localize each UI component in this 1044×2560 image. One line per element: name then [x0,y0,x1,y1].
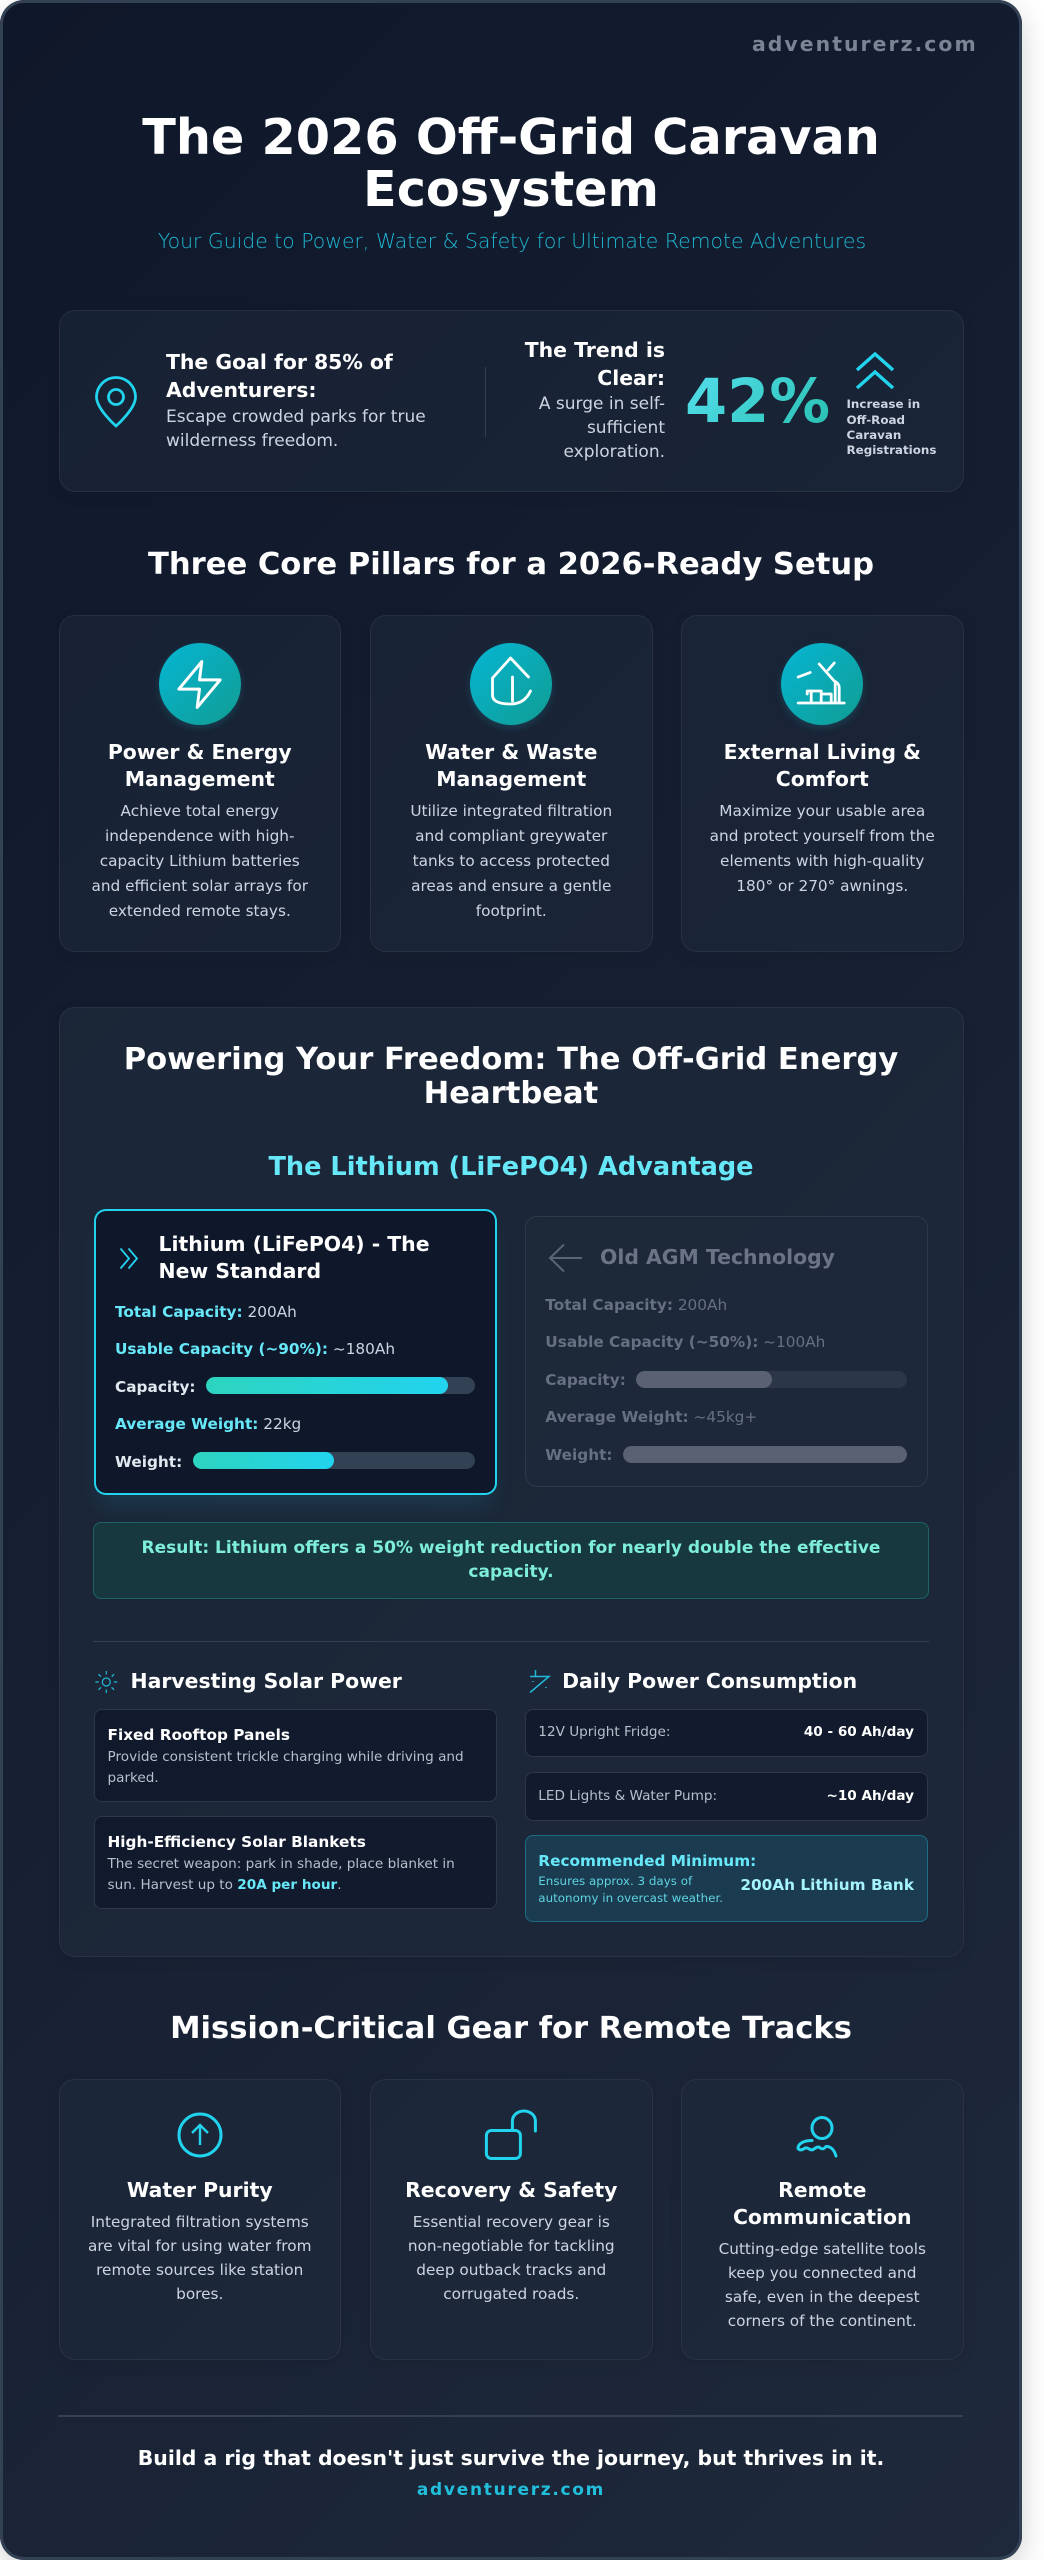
statistic label: Off-Road [846,412,905,426]
title: Ecosystem [363,160,659,218]
icon: double chevron up [856,352,894,390]
statistic label: Caravan [846,428,901,442]
weight bar [192,1452,475,1469]
heading: mission-critical gear: Mission-Critical Gear for Remote Tracks [170,2011,852,2046]
gear title: Communication [733,2205,912,2229]
heading: harvesting solar power: Harvesting Solar Power [130,1669,402,1693]
trend description: A surge in self- [539,394,665,414]
pillar description: tanks to access protected [413,852,610,870]
closing statement: Build a rig that doesn't just survive the journey, but thrives in it. [138,2446,884,2470]
lithium card title: Lithium (LiFePO4) - The [158,1232,430,1256]
pillar description: extended remote stays. [109,902,291,920]
row: lights and pump consumption [525,1772,928,1821]
lights value: ~10 Ah/day [826,1788,914,1804]
panel: power and energy [58,615,341,952]
title: The 2026 Off-Grid Caravan [142,108,880,166]
goal heading: The Goal for 85% of [166,350,393,374]
gear description: Essential recovery gear is [413,2213,610,2231]
pillar title: Power & Energy [108,740,292,764]
heading: three core pillars: Three Core Pillars for a 2026-Ready Setup [148,547,874,582]
gear description: safe, even in the deepest [725,2288,920,2306]
brand tag: adventurerz.com [752,32,978,56]
capacity bar [206,1377,475,1394]
gear description [719,2240,926,2330]
capacity label: Capacity: [115,1378,196,1396]
pillar description: and compliant greywater [415,827,607,845]
recommended value: 200Ah Lithium Bank [740,1876,914,1894]
result text [142,1538,880,1582]
gear description: are vital for using water from [88,2237,312,2255]
pillar title: Water & Waste [425,740,597,764]
footer brand: adventurerz.com [417,2480,605,2500]
statistic label: Increase in [846,397,920,411]
gear description: corrugated roads. [443,2285,579,2303]
panel: powering your freedom [58,1007,964,1957]
gear description: deep outback tracks and [416,2261,606,2279]
usable capacity: Usable Capacity (~90%): ~180Ah [115,1340,395,1358]
card: old AGM [525,1216,928,1487]
average weight: Average Weight: 22kg [115,1415,301,1433]
icon: double chevron right [120,1248,138,1270]
gear title: Water Purity [127,2178,273,2202]
statistic: 42 percent: 42% [685,367,830,437]
pillar title: Management [125,766,275,790]
result text: Result: Lithium offers a 50% weight reduction for nearly double the effective [142,1538,880,1558]
box: solar blankets [94,1816,497,1909]
lithium advantage subheading: The Lithium (LiFePO4) Advantage [268,1152,754,1182]
pillar description: Achieve total energy [121,802,279,820]
total capacity: Total Capacity: 200Ah [115,1303,297,1321]
recommended note: Ensures approx. 3 days of [538,1874,692,1888]
horizontal divider [93,1640,929,1642]
icon: left arrow [548,1244,582,1272]
panel: recovery and safety [370,2079,652,2360]
gear description [408,2213,615,2303]
lithium card title [158,1232,430,1283]
callout: recommended minimum [525,1835,928,1922]
pillar description: elements with high-quality [720,852,924,870]
gear description: corners of the continent. [728,2312,917,2330]
capacity label: Capacity: [545,1371,626,1389]
weight label: Weight: [545,1446,613,1464]
recommended note [538,1874,723,1905]
box description [107,1856,455,1892]
pillar title [425,740,597,790]
weight label: Weight: [115,1453,182,1471]
box description: sun. Harvest up to 20A per hour. [108,1876,342,1892]
card: lithium [94,1209,497,1495]
recommended title: Recommended Minimum: [538,1852,756,1870]
trend heading: Clear: [597,366,665,390]
box: fixed rooftop panels [94,1709,497,1802]
pillar title [724,740,921,790]
icon: map pin [95,376,137,428]
gear title: Recovery & Safety [405,2178,617,2202]
AGM card title: Old AGM Technology [600,1245,835,1269]
total capacity: Total Capacity: 200Ah [545,1296,727,1314]
gear title: Remote [778,2178,866,2202]
pillar description: and protect yourself from the [710,827,935,845]
trend description: exploration. [563,442,665,462]
statistic label: Registrations [846,443,936,457]
average weight: Average Weight: ~45kg+ [545,1408,757,1426]
box description: parked. [108,1770,159,1786]
capacity bar [636,1371,907,1388]
pillar title [108,740,292,790]
result text: capacity. [468,1562,554,1582]
pillar description [710,802,935,895]
weight bar [623,1446,907,1463]
trend heading [524,338,665,390]
panel: remote communication [681,2079,964,2360]
pillar description: capacity Lithium batteries [100,852,300,870]
fridge label: 12V Upright Fridge: [538,1724,670,1740]
icon: solar blanket [530,1670,551,1693]
panel: water and waste [370,615,652,952]
box description: The secret weapon: park in shade, place blanket in [108,1856,455,1872]
statistic label [846,397,936,457]
pillar title: External Living & [724,740,921,764]
result callout [93,1522,929,1599]
pillar description: Utilize integrated filtration [410,802,612,820]
fridge value: 40 - 60 Ah/day [804,1724,914,1740]
gear description: remote sources like station [96,2261,303,2279]
pillar description: independence with high- [105,827,295,845]
pillar title: Management [436,766,586,790]
gear description: Cutting-edge satellite tools [719,2240,926,2258]
box title: High-Efficiency Solar Blankets [108,1833,366,1851]
icon: awning and table [781,643,863,725]
pillar description: Maximize your usable area [719,802,925,820]
vertical divider [485,367,486,437]
goal heading: Adventurers: [166,378,317,402]
usable capacity: Usable Capacity (~50%): ~100Ah [545,1333,825,1351]
box description: Provide consistent trickle charging while driving and [108,1749,464,1765]
trend description: sufficient [587,418,665,438]
lights label: LED Lights & Water Pump: [538,1788,717,1804]
icon: water house [470,643,552,725]
pillar title: Comfort [776,766,869,790]
pillar description: and efficient solar arrays for [91,877,308,895]
goal description [166,407,426,451]
icon: arrow in circle [178,2112,222,2158]
gear title [733,2178,912,2229]
icon: sun [95,1671,118,1693]
gear description [88,2213,312,2303]
pillar description: footprint. [476,902,547,920]
gear description: bores. [176,2285,223,2303]
row: fridge consumption [525,1709,928,1757]
panel: external living [681,615,964,952]
section heading: Powering Your Freedom: The Off-Grid Energy [124,1042,898,1077]
box description [108,1749,464,1786]
subtitle: Your Guide to Power, Water & Safety for Ultimate Remote Adventures [158,229,866,253]
icon: lightning bolt [159,643,241,725]
goal description: wilderness freedom. [166,431,338,451]
lithium card title: New Standard [158,1259,321,1283]
pillar description: areas and ensure a gentle [411,877,611,895]
gear description: Integrated filtration systems [91,2213,309,2231]
pillar description: 180° or 270° awnings. [736,877,908,895]
gear description: non-negotiable for tackling [408,2237,615,2255]
section heading [124,1042,898,1111]
icon: person with signal [796,2116,838,2158]
box title: Fixed Rooftop Panels [108,1726,290,1744]
section heading: Heartbeat [424,1076,598,1111]
pillar description [410,802,612,920]
recommended note: autonomy in overcast weather. [538,1891,723,1905]
pillar description [91,802,308,920]
goal description: Escape crowded parks for true [166,407,426,427]
heading: daily power consumption: Daily Power Consumption [562,1669,857,1693]
panel: goal and trend stats [58,310,964,492]
trend description [539,394,665,462]
title [142,108,880,218]
panel: water purity [58,2079,341,2360]
trend heading: The Trend is [525,338,665,362]
gear description: keep you connected and [728,2264,916,2282]
icon: open lock [484,2110,537,2160]
goal heading [166,350,393,402]
footer divider [58,2415,963,2417]
